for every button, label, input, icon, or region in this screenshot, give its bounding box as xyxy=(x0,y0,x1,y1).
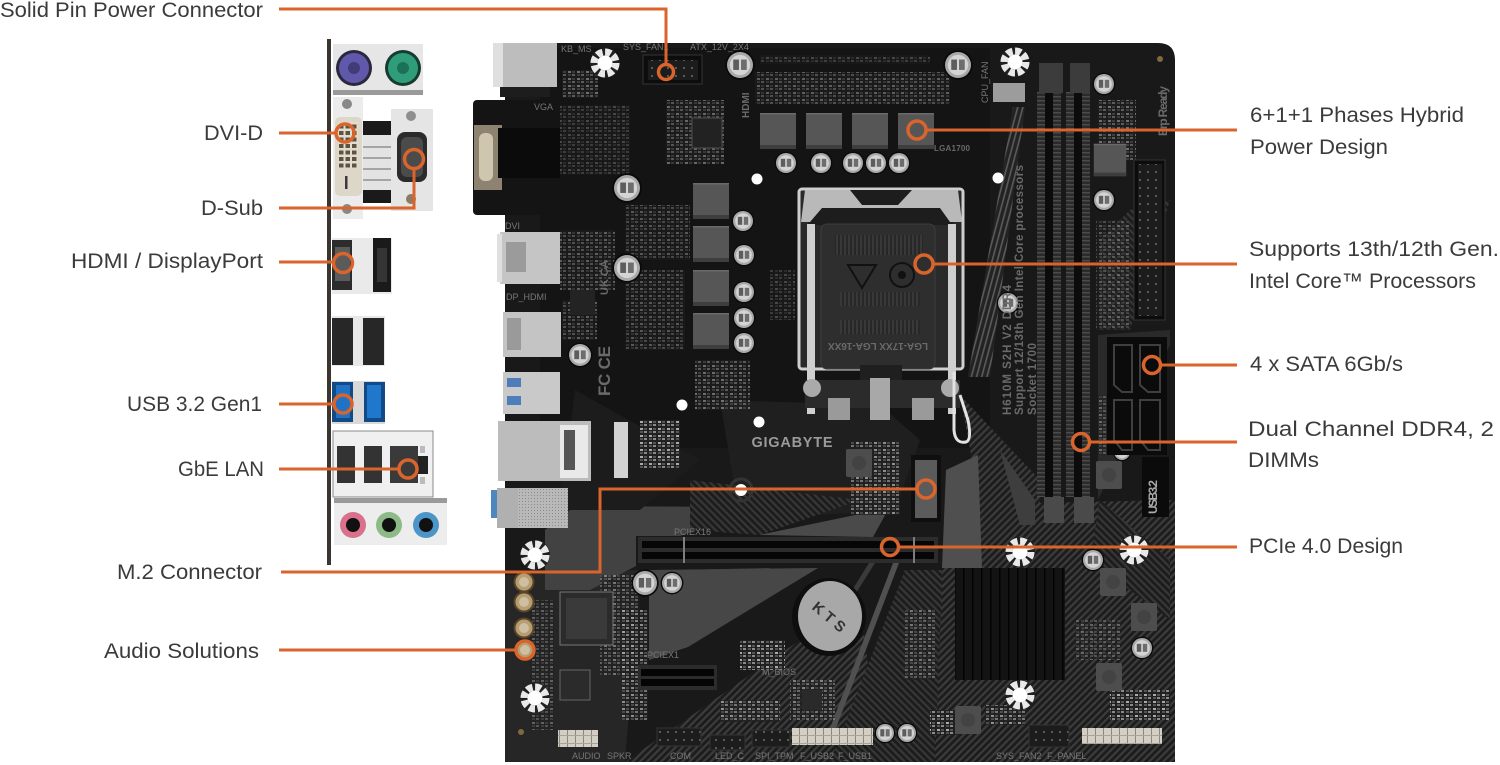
callouts: left labels xyxy=(0,0,935,663)
callout: audio solutions: Audio Solutions xyxy=(104,640,259,663)
callout: M.2 connector xyxy=(117,480,935,584)
board silkscreen: F_USB2 xyxy=(800,751,834,761)
callout: phases hybrid power design: 6+1+1 Phases Hybrid xyxy=(1250,104,1464,127)
callout: SATA xyxy=(1144,353,1403,376)
callout: dual channel DDR4 xyxy=(1072,418,1494,472)
board silkscreen: USB3.2 xyxy=(1146,480,1160,514)
callout: GbE LAN xyxy=(178,458,417,481)
board silkscreen: DVI xyxy=(505,221,520,231)
board silkscreen: KB_MS xyxy=(561,44,592,54)
callout: SATA: 4 x SATA 6Gb/s xyxy=(1250,353,1403,376)
callout: supported processors xyxy=(915,238,1499,293)
callout: dual channel DDR4: DIMMs xyxy=(1248,449,1319,472)
M.2 slot xyxy=(911,455,941,522)
CPU socket xyxy=(799,189,970,442)
USB 3.2 header xyxy=(1142,457,1169,517)
board silkscreen: SYS_FAN2 xyxy=(996,751,1042,761)
audio capacitors xyxy=(514,572,536,660)
callout: USB 3.2 Gen1: USB 3.2 Gen1 xyxy=(127,393,262,416)
8-pin ATX 12V power connector xyxy=(643,55,702,84)
USB 3.2 Gen1 ports xyxy=(332,381,385,424)
board silkscreen: LGA1700 xyxy=(934,144,971,153)
SMD component clusters xyxy=(530,55,1170,735)
HDMI and DisplayPort ports xyxy=(332,238,392,294)
board silkscreen: COM xyxy=(670,751,691,761)
small power chokes xyxy=(846,449,1157,734)
ATX 24-pin connector xyxy=(1134,160,1165,320)
board silkscreen: GIGABYTE xyxy=(752,435,833,451)
CPU socket: LGA-17XX LGA-16XX xyxy=(828,340,928,351)
DDR4 memory slots xyxy=(1037,63,1094,523)
callout: phases hybrid power design: Power Design xyxy=(1250,136,1388,159)
upper board darker zone xyxy=(540,48,990,448)
board silkscreen: M_BIOS xyxy=(762,667,796,677)
callout: GbE LAN: GbE LAN xyxy=(178,458,264,481)
board silkscreen: SYS_FAN1 xyxy=(623,42,669,52)
callout: D-Sub: D-Sub xyxy=(201,197,263,220)
front headers xyxy=(558,725,1162,750)
onboard IO connectors xyxy=(473,43,628,528)
callout: PCIe 4.0: PCIe 4.0 Design xyxy=(1249,535,1403,558)
audio jacks xyxy=(334,498,447,545)
board silkscreen: Erp Ready xyxy=(1156,86,1170,136)
callout: HDMI / DisplayPort xyxy=(71,250,352,273)
board silkscreen: PCIEX1 xyxy=(647,650,679,660)
board silkscreen: CPU_FAN xyxy=(980,61,990,103)
board silkscreen: Support 12/13th Gen Intel Core processors xyxy=(1014,165,1026,415)
callouts: right labels xyxy=(882,104,1499,558)
board silkscreen: Socket 1700 xyxy=(1027,343,1039,415)
board silkscreen xyxy=(505,42,1170,761)
callout: HDMI / DisplayPort: HDMI / DisplayPort xyxy=(71,250,263,273)
board silkscreen: F_PANEL xyxy=(1047,751,1086,761)
PCIe x1 slot xyxy=(638,665,717,690)
board silkscreen: SPI_TPM xyxy=(755,751,794,761)
board silkscreen: FC CE xyxy=(595,346,614,396)
callout: USB 3.2 Gen1 xyxy=(127,393,352,416)
board silkscreen: F_USB1 xyxy=(838,751,872,761)
callout: audio solutions xyxy=(104,640,534,663)
SATA ports xyxy=(1107,337,1167,455)
callout: dual channel DDR4: Dual Channel DDR4, 2 xyxy=(1248,418,1494,441)
capacitors xyxy=(567,50,1153,743)
PCIe x16 slot xyxy=(638,455,982,568)
callout: M.2 connector: M.2 Connector xyxy=(117,561,262,584)
board silkscreen: VGA xyxy=(534,102,553,112)
D-Sub port xyxy=(391,109,433,211)
callout: D-Sub xyxy=(201,150,424,220)
board silkscreen: ATX_12V_2X4 xyxy=(690,42,749,52)
LAN and USB block xyxy=(333,431,433,497)
callout: solid pin power connector xyxy=(0,0,674,80)
CMOS battery xyxy=(792,578,866,656)
callout: supported processors: Supports 13th/12th Gen. xyxy=(1249,238,1499,261)
board silkscreen: PCIEX16 xyxy=(674,527,711,537)
board silkscreen: SPKR xyxy=(607,751,632,761)
DVI-D port xyxy=(333,97,395,219)
board silkscreen: HDMI xyxy=(741,92,752,118)
heatsink xyxy=(955,568,1065,680)
chipset and ICs xyxy=(560,118,822,710)
board silkscreen: DP_HDMI xyxy=(506,292,547,302)
mounting holes xyxy=(518,47,1163,735)
CPU fan header xyxy=(993,83,1025,102)
callout: supported processors: Intel Core™ Processors xyxy=(1249,270,1476,293)
board silkscreen: UK CA xyxy=(599,260,611,295)
USB 2.0 ports xyxy=(332,316,385,366)
panel: motherboard xyxy=(473,42,1175,762)
callout: phases hybrid power design xyxy=(908,104,1464,159)
board graphics xyxy=(505,107,1175,762)
board silkscreen: LED_C xyxy=(715,751,745,761)
panel: rear IO shield view xyxy=(327,39,447,565)
callout: DVI-D xyxy=(204,122,354,145)
board PCB xyxy=(505,43,1175,762)
PS/2 ports xyxy=(333,44,423,95)
memory voltage chokes row xyxy=(693,113,1126,349)
shield bar xyxy=(327,39,331,565)
callout: DVI-D: DVI-D xyxy=(204,122,263,145)
CMOS battery: K T S xyxy=(809,599,849,636)
callout: PCIe 4.0 xyxy=(882,535,1403,558)
board silkscreen: AUDIO xyxy=(572,751,601,761)
board silkscreen: H610M S2H V2 DDR4 xyxy=(1002,284,1014,415)
